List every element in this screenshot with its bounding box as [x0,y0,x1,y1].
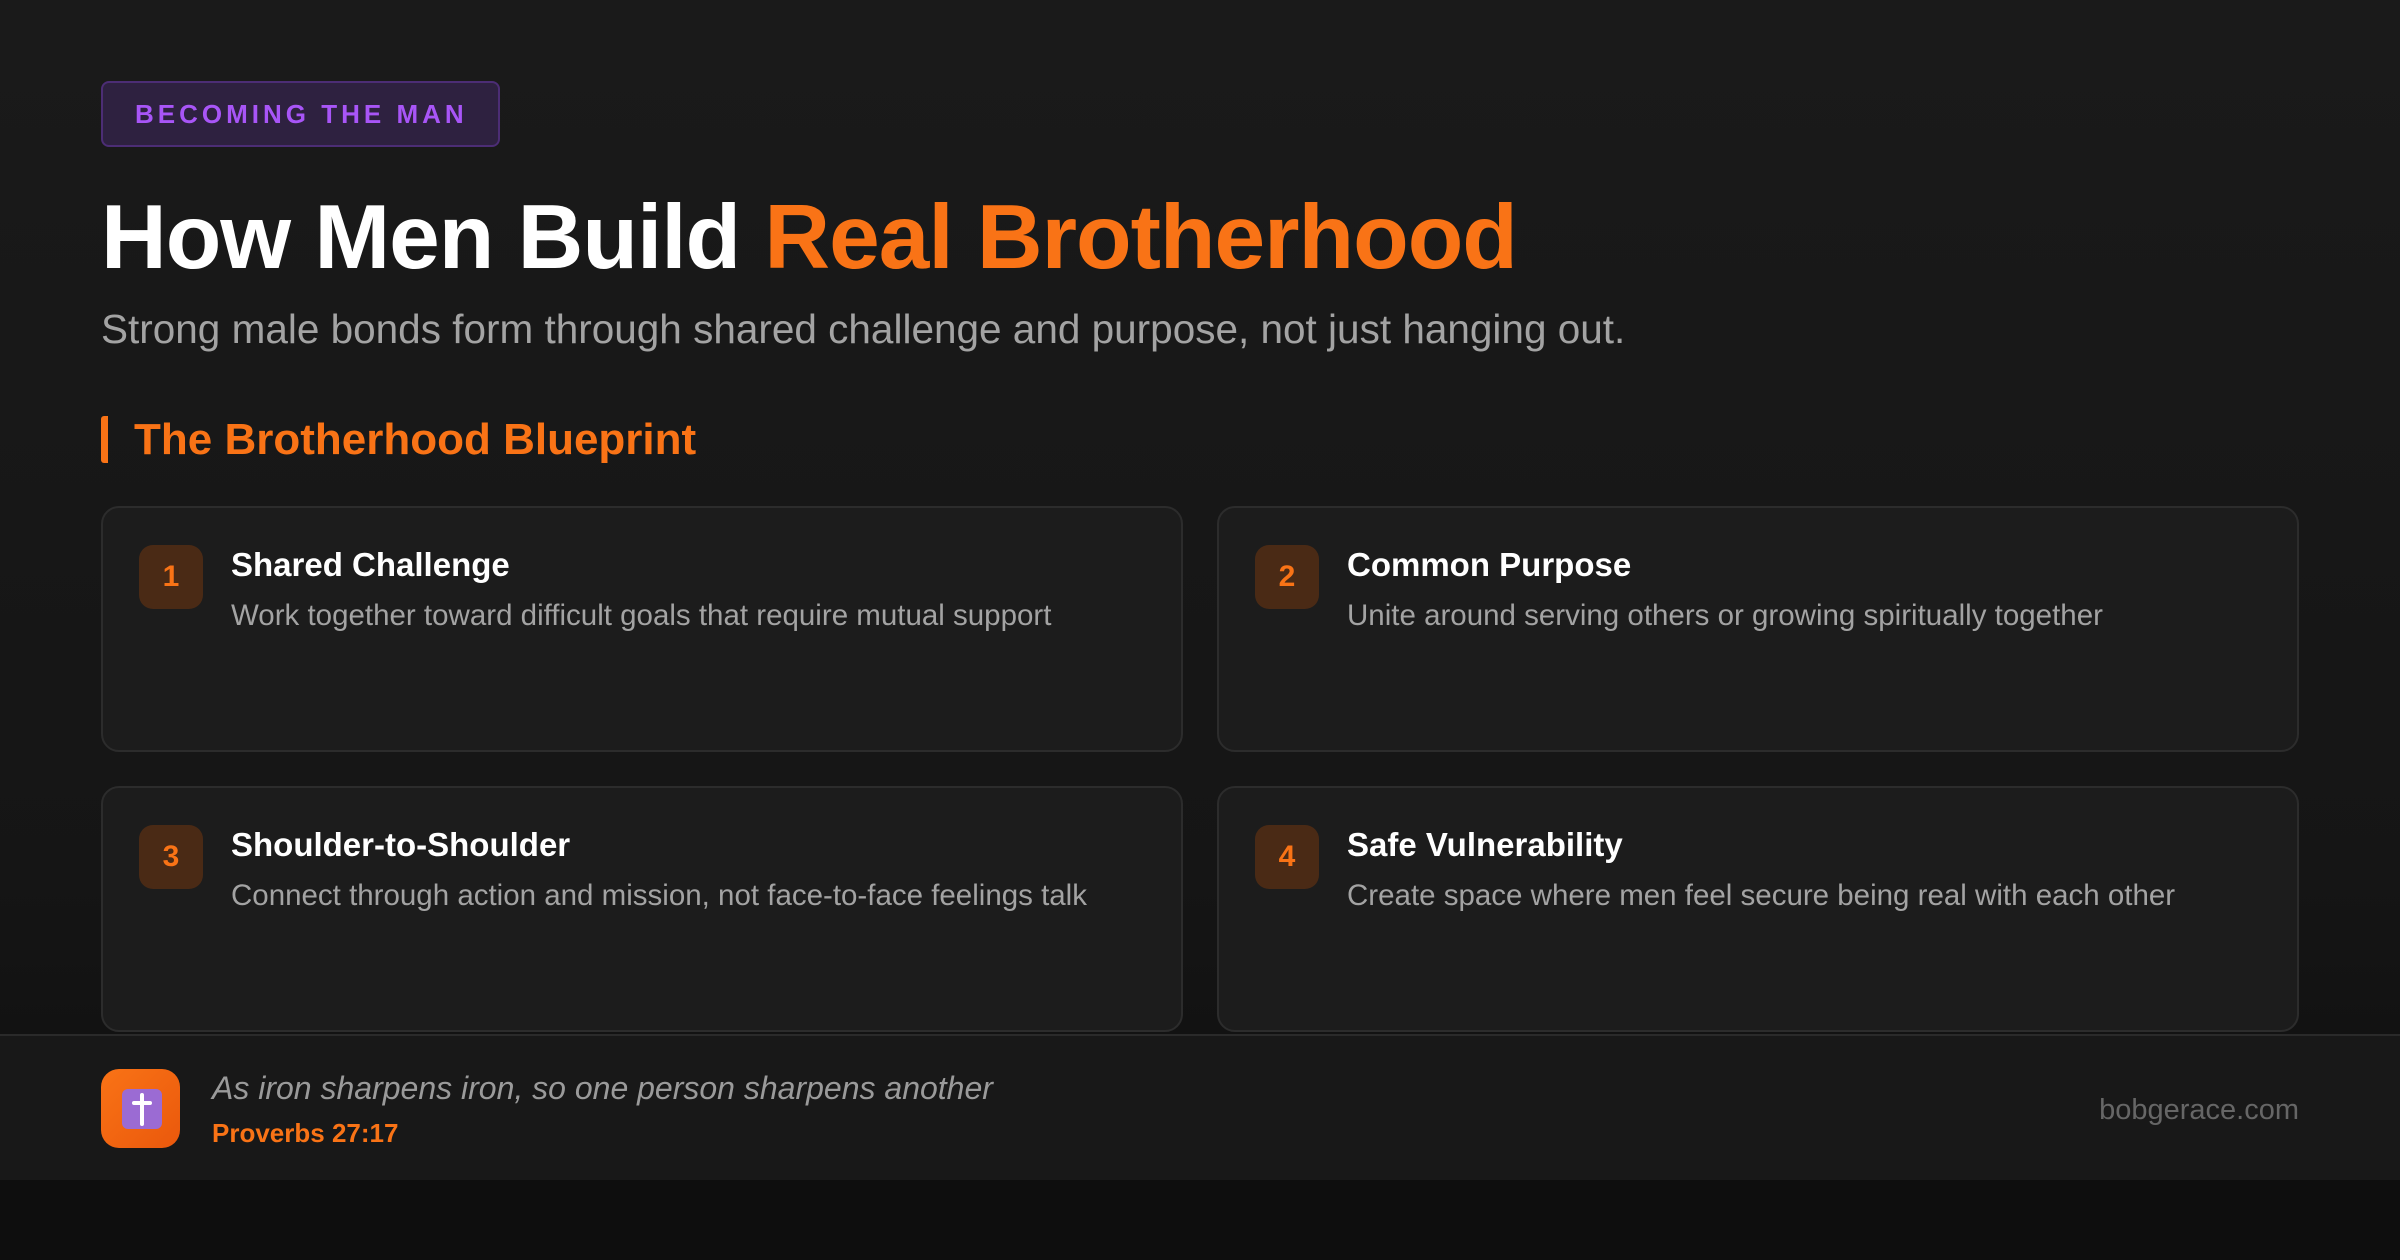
icon: cross [101,1069,180,1148]
card title: Shoulder-to-Shoulder [231,826,570,863]
card description: Connect through action and mission, not face-to-face feelings talk [231,879,1087,912]
number badge 4 [1255,825,1319,889]
quote: As iron sharpens iron, so one person sharpens another [212,1070,993,1106]
card title: Common Purpose [1347,546,1631,583]
number badge 3 [139,825,203,889]
number badge 1: 1 [163,560,179,593]
card 3: shoulder-to-shoulder [101,786,1183,1032]
number badge 1 [139,545,203,609]
badge [101,81,500,147]
card 1: shared challenge [101,506,1183,752]
badge: BECOMING THE MAN [135,99,468,129]
footer band [0,1034,2400,1180]
reference: Proverbs 27:17 [212,1118,398,1148]
card 2: common purpose [1217,506,2299,752]
card title: Safe Vulnerability [1347,826,1623,863]
title: How Men Build Real Brotherhood [101,187,1517,288]
website: bobgerace.com [2099,1094,2299,1126]
number badge 3: 3 [163,840,179,873]
card title: Shared Challenge [231,546,510,583]
number badge 2 [1255,545,1319,609]
section heading: The Brotherhood Blueprint [134,415,696,464]
card description: Work together toward difficult goals that require mutual support [231,599,1051,632]
card 4: safe vulnerability [1217,786,2299,1032]
number badge 2: 2 [1279,560,1295,593]
number badge 4: 4 [1279,840,1295,873]
card description: Create space where men feel secure being real with each other [1347,879,2175,912]
card description: Unite around serving others or growing spiritually together [1347,599,2103,632]
subtitle: Strong male bonds form through shared challenge and purpose, not just hanging out. [101,306,1625,352]
